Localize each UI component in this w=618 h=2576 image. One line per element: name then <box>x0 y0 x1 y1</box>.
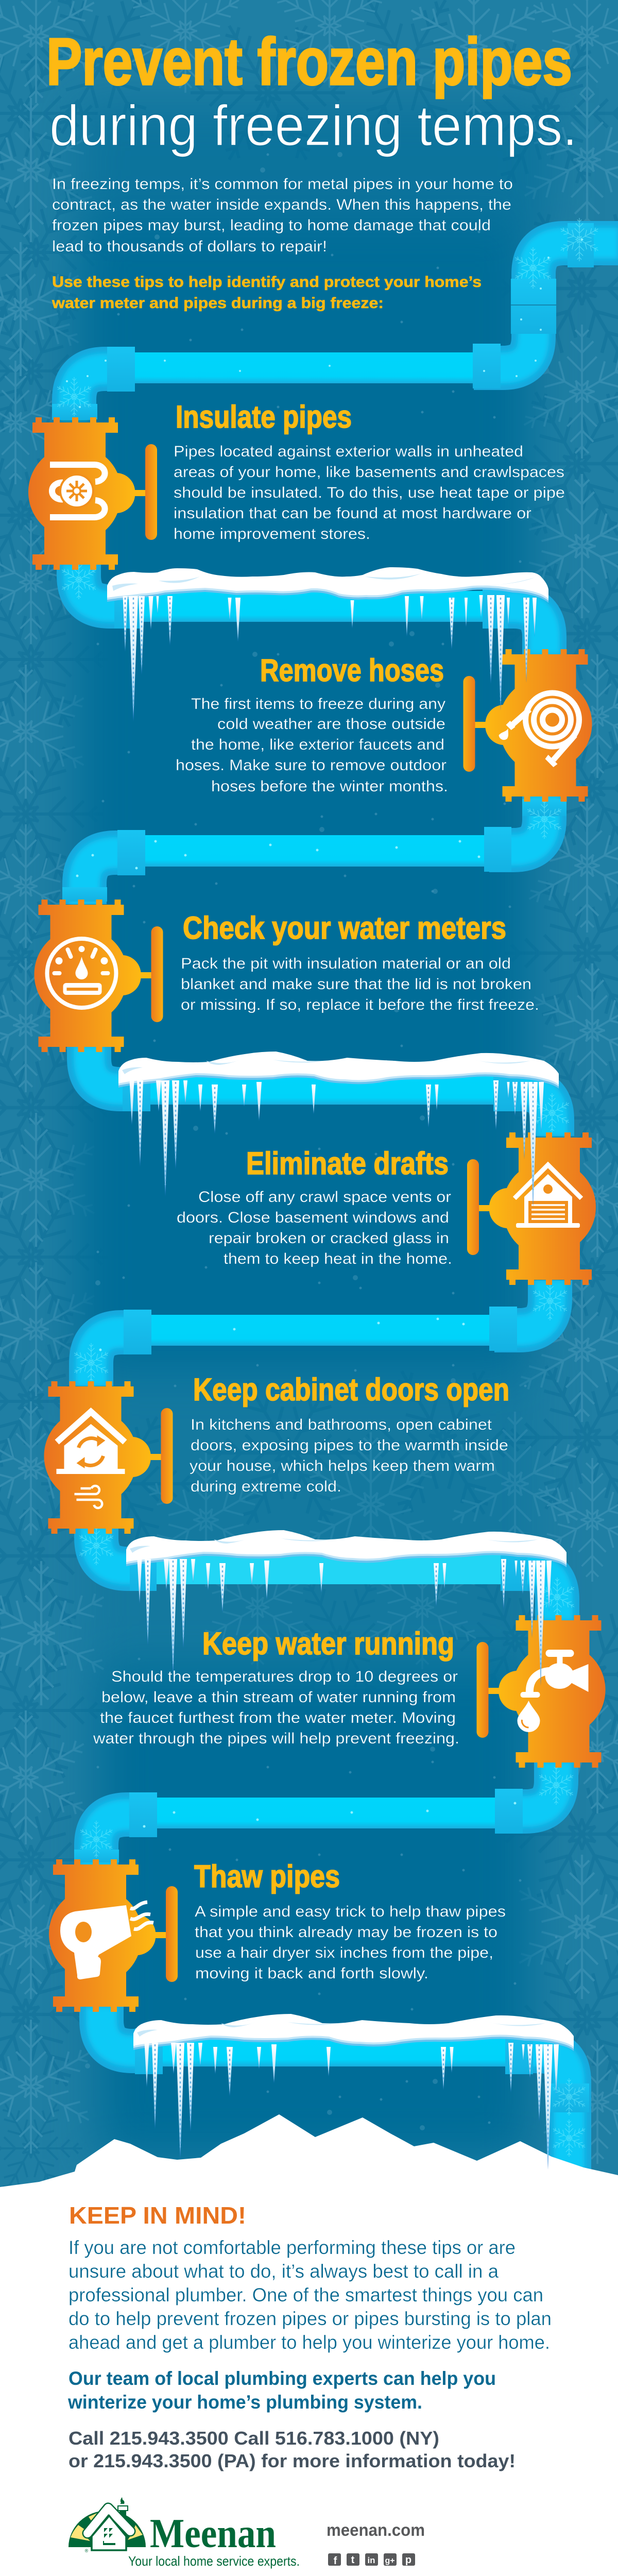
tip: insulate pipes: should be insulated. To do this, use heat tape or pipe <box>174 484 565 501</box>
pipe: remove-hoses valve to water-meter valve <box>62 796 566 904</box>
keep in mind paragraph: do to help prevent frozen pipes or pipes bursting is to plan <box>68 2308 552 2329</box>
tip: check your water meters: Check your water meters <box>183 910 506 945</box>
icon: house and sun <box>68 2497 146 2553</box>
keep in mind paragraph <box>68 2237 552 2353</box>
social icons: g+ <box>385 2556 395 2565</box>
social icons: p <box>405 2554 411 2566</box>
title: during freezing temps. <box>49 94 577 158</box>
icon: water gauge <box>47 939 116 1008</box>
icon: house and sun: ® <box>85 2548 89 2553</box>
icon: house with circulating arrows and wind <box>57 1412 125 1508</box>
intro paragraph: lead to thousands of dollars to repair! <box>52 238 327 255</box>
tip: keep cabinet doors open: during extreme cold. <box>191 1478 341 1495</box>
tip: remove hoses: hoses before the winter months. <box>211 778 448 795</box>
icon: house with garage door <box>514 1165 581 1228</box>
intro call to action: Use these tips to help identify and protect your home’s <box>52 274 482 291</box>
tip: keep water running <box>93 1626 459 1747</box>
tip: remove hoses: Remove hoses <box>260 653 444 688</box>
icon: dripping faucet <box>517 1650 588 1732</box>
team statement: winterize your home’s plumbing system. <box>67 2392 422 2413</box>
tip: keep cabinet doors open: your house, which helps keep them warm <box>190 1458 495 1475</box>
tip: keep cabinet doors open: doors, exposing pipes to the warmth inside <box>191 1437 508 1454</box>
icicles group 2 <box>130 1080 544 1207</box>
tip: eliminate drafts: Close off any crawl space vents or <box>198 1189 451 1206</box>
snow ground <box>0 2114 618 2226</box>
social icons <box>328 2553 415 2567</box>
icicles group 4 <box>144 2043 559 2170</box>
tip: keep water running: water through the pipes will help prevent freezing. <box>93 1730 459 1747</box>
call to action phone numbers <box>68 2428 516 2471</box>
intro paragraph <box>52 176 513 255</box>
valve: eliminate drafts <box>467 1132 596 1285</box>
icicles group 3 <box>137 1559 552 1686</box>
tip: keep cabinet doors open <box>190 1372 509 1495</box>
pipe: water-running valve to thaw valve <box>74 1762 575 1865</box>
tip: insulate pipes: Insulate pipes <box>176 399 352 434</box>
valve: check water meters <box>34 900 163 1052</box>
tip: keep cabinet doors open: In kitchens and bathrooms, open cabinet <box>191 1416 492 1433</box>
social icons: f <box>334 2555 337 2567</box>
pipe: water-meter valve to drafts valve <box>89 1046 571 1136</box>
tip: eliminate drafts: them to keep heat in the home. <box>224 1250 452 1267</box>
pipe: drafts valve to cabinet valve <box>72 1280 569 1386</box>
intro paragraph: frozen pipes may burst, leading to home damage that could <box>52 217 491 234</box>
intro call to action: water meter and pipes during a big freeze: <box>52 295 384 312</box>
tip: thaw pipes: use a hair dryer six inches from the pipe, <box>195 1944 493 1961</box>
icicles group 1 <box>123 595 537 722</box>
tip: insulate pipes: Pipes located against exterior walls in unheated <box>174 443 523 460</box>
valve: keep water running <box>477 1615 606 1768</box>
keep in mind paragraph: ahead and get a plumber to help you winterize your home. <box>68 2332 550 2353</box>
tip: insulate pipes <box>174 399 565 543</box>
valve: insulate pipes <box>28 417 157 570</box>
tip: check your water meters: or missing. If so, replace it before the first freeze. <box>181 996 539 1013</box>
pipe: inlet from the right down to insulate valve <box>52 218 618 420</box>
valve: remove hoses <box>464 649 592 802</box>
tip: remove hoses: The first items to freeze during any <box>191 696 445 713</box>
keep in mind paragraph: unsure about what to do, it’s always best to call in a <box>68 2261 499 2282</box>
pipe: insulate valve to remove-hoses valve <box>60 560 544 654</box>
social icons: in <box>367 2555 375 2565</box>
tip: remove hoses <box>176 653 448 795</box>
tip: remove hoses: cold weather are those outside <box>217 716 445 733</box>
snow cap 3 <box>126 1530 566 1567</box>
logo: Meenan: Meenan <box>150 2511 276 2556</box>
tip: eliminate drafts: doors. Close basement windows and <box>177 1209 449 1226</box>
snow cap 1 <box>107 567 548 603</box>
keep in mind paragraph: professional plumber. One of the smartest things you can <box>68 2284 543 2306</box>
tip: insulate pipes: home improvement stores. <box>174 526 370 543</box>
tip: eliminate drafts <box>177 1146 452 1267</box>
tip: thaw pipes: Thaw pipes <box>194 1859 340 1894</box>
call to action phone numbers: Call 215.943.3500 Call 516.783.1000 (NY) <box>68 2428 439 2449</box>
snow cap 4 <box>133 2014 574 2051</box>
intro paragraph: In freezing temps, it’s common for metal pipes in your home to <box>52 176 513 193</box>
tip: check your water meters: Pack the pit with insulation material or an old <box>181 955 511 972</box>
social icons: t <box>351 2554 355 2566</box>
valve: thaw pipes <box>49 1859 178 2012</box>
call to action phone numbers: or 215.943.3500 (PA) for more information today! <box>68 2450 516 2471</box>
tip: remove hoses: hoses. Make sure to remove outdoor <box>176 757 447 774</box>
team statement: Our team of local plumbing experts can help you <box>68 2368 496 2389</box>
pipe: thaw valve to outlet <box>101 2007 589 2172</box>
tip: keep water running: the faucet furthest from the water meter. Moving <box>100 1709 456 1726</box>
logo: Meenan <box>68 2497 300 2569</box>
tip: keep water running: Keep water running <box>202 1626 454 1661</box>
team statement <box>67 2368 496 2413</box>
website: meenan.com <box>327 2520 425 2539</box>
tip: thaw pipes: moving it back and forth slowly. <box>195 1965 428 1982</box>
icon: hair dryer <box>60 1902 153 1979</box>
tip: eliminate drafts: repair broken or cracked glass in <box>209 1230 449 1247</box>
tip: insulate pipes: areas of your home, like basements and crawlspaces <box>174 464 564 481</box>
tip: remove hoses: the home, like exterior faucets and <box>191 736 444 753</box>
title <box>46 25 577 158</box>
tip: insulate pipes: insulation that can be found at most hardware or <box>174 505 531 522</box>
pipe: cabinet valve to water-running valve <box>77 1526 576 1620</box>
icon: heat tape around pipe <box>50 465 105 517</box>
valve: keep cabinet doors open <box>44 1381 173 1534</box>
tip: keep water running: below, leave a thin stream of water running from <box>101 1689 456 1706</box>
keep in mind paragraph: If you are not comfortable performing these tips or are <box>68 2237 516 2258</box>
icon: coiled garden hose <box>499 693 579 767</box>
keep in mind heading: KEEP IN MIND! <box>69 2202 246 2229</box>
tip: thaw pipes: that you think already may be frozen is to <box>195 1924 497 1941</box>
intro paragraph: contract, as the water inside expands. When this happens, the <box>52 196 511 213</box>
tip: keep water running: Should the temperatures drop to 10 degrees or <box>111 1668 458 1685</box>
tip: eliminate drafts: Eliminate drafts <box>246 1146 449 1181</box>
tip: check your water meters: blanket and make sure that the lid is not broken <box>181 976 531 993</box>
tip: thaw pipes <box>194 1859 506 1982</box>
snow cap 2 <box>118 1052 559 1089</box>
intro call to action <box>52 274 482 312</box>
logo: Meenan: Your local home service experts. <box>128 2553 300 2569</box>
tip: check your water meters <box>181 910 539 1013</box>
tip: keep cabinet doors open: Keep cabinet doors open <box>193 1372 509 1407</box>
tip: thaw pipes: A simple and easy trick to help thaw pipes <box>195 1903 506 1920</box>
